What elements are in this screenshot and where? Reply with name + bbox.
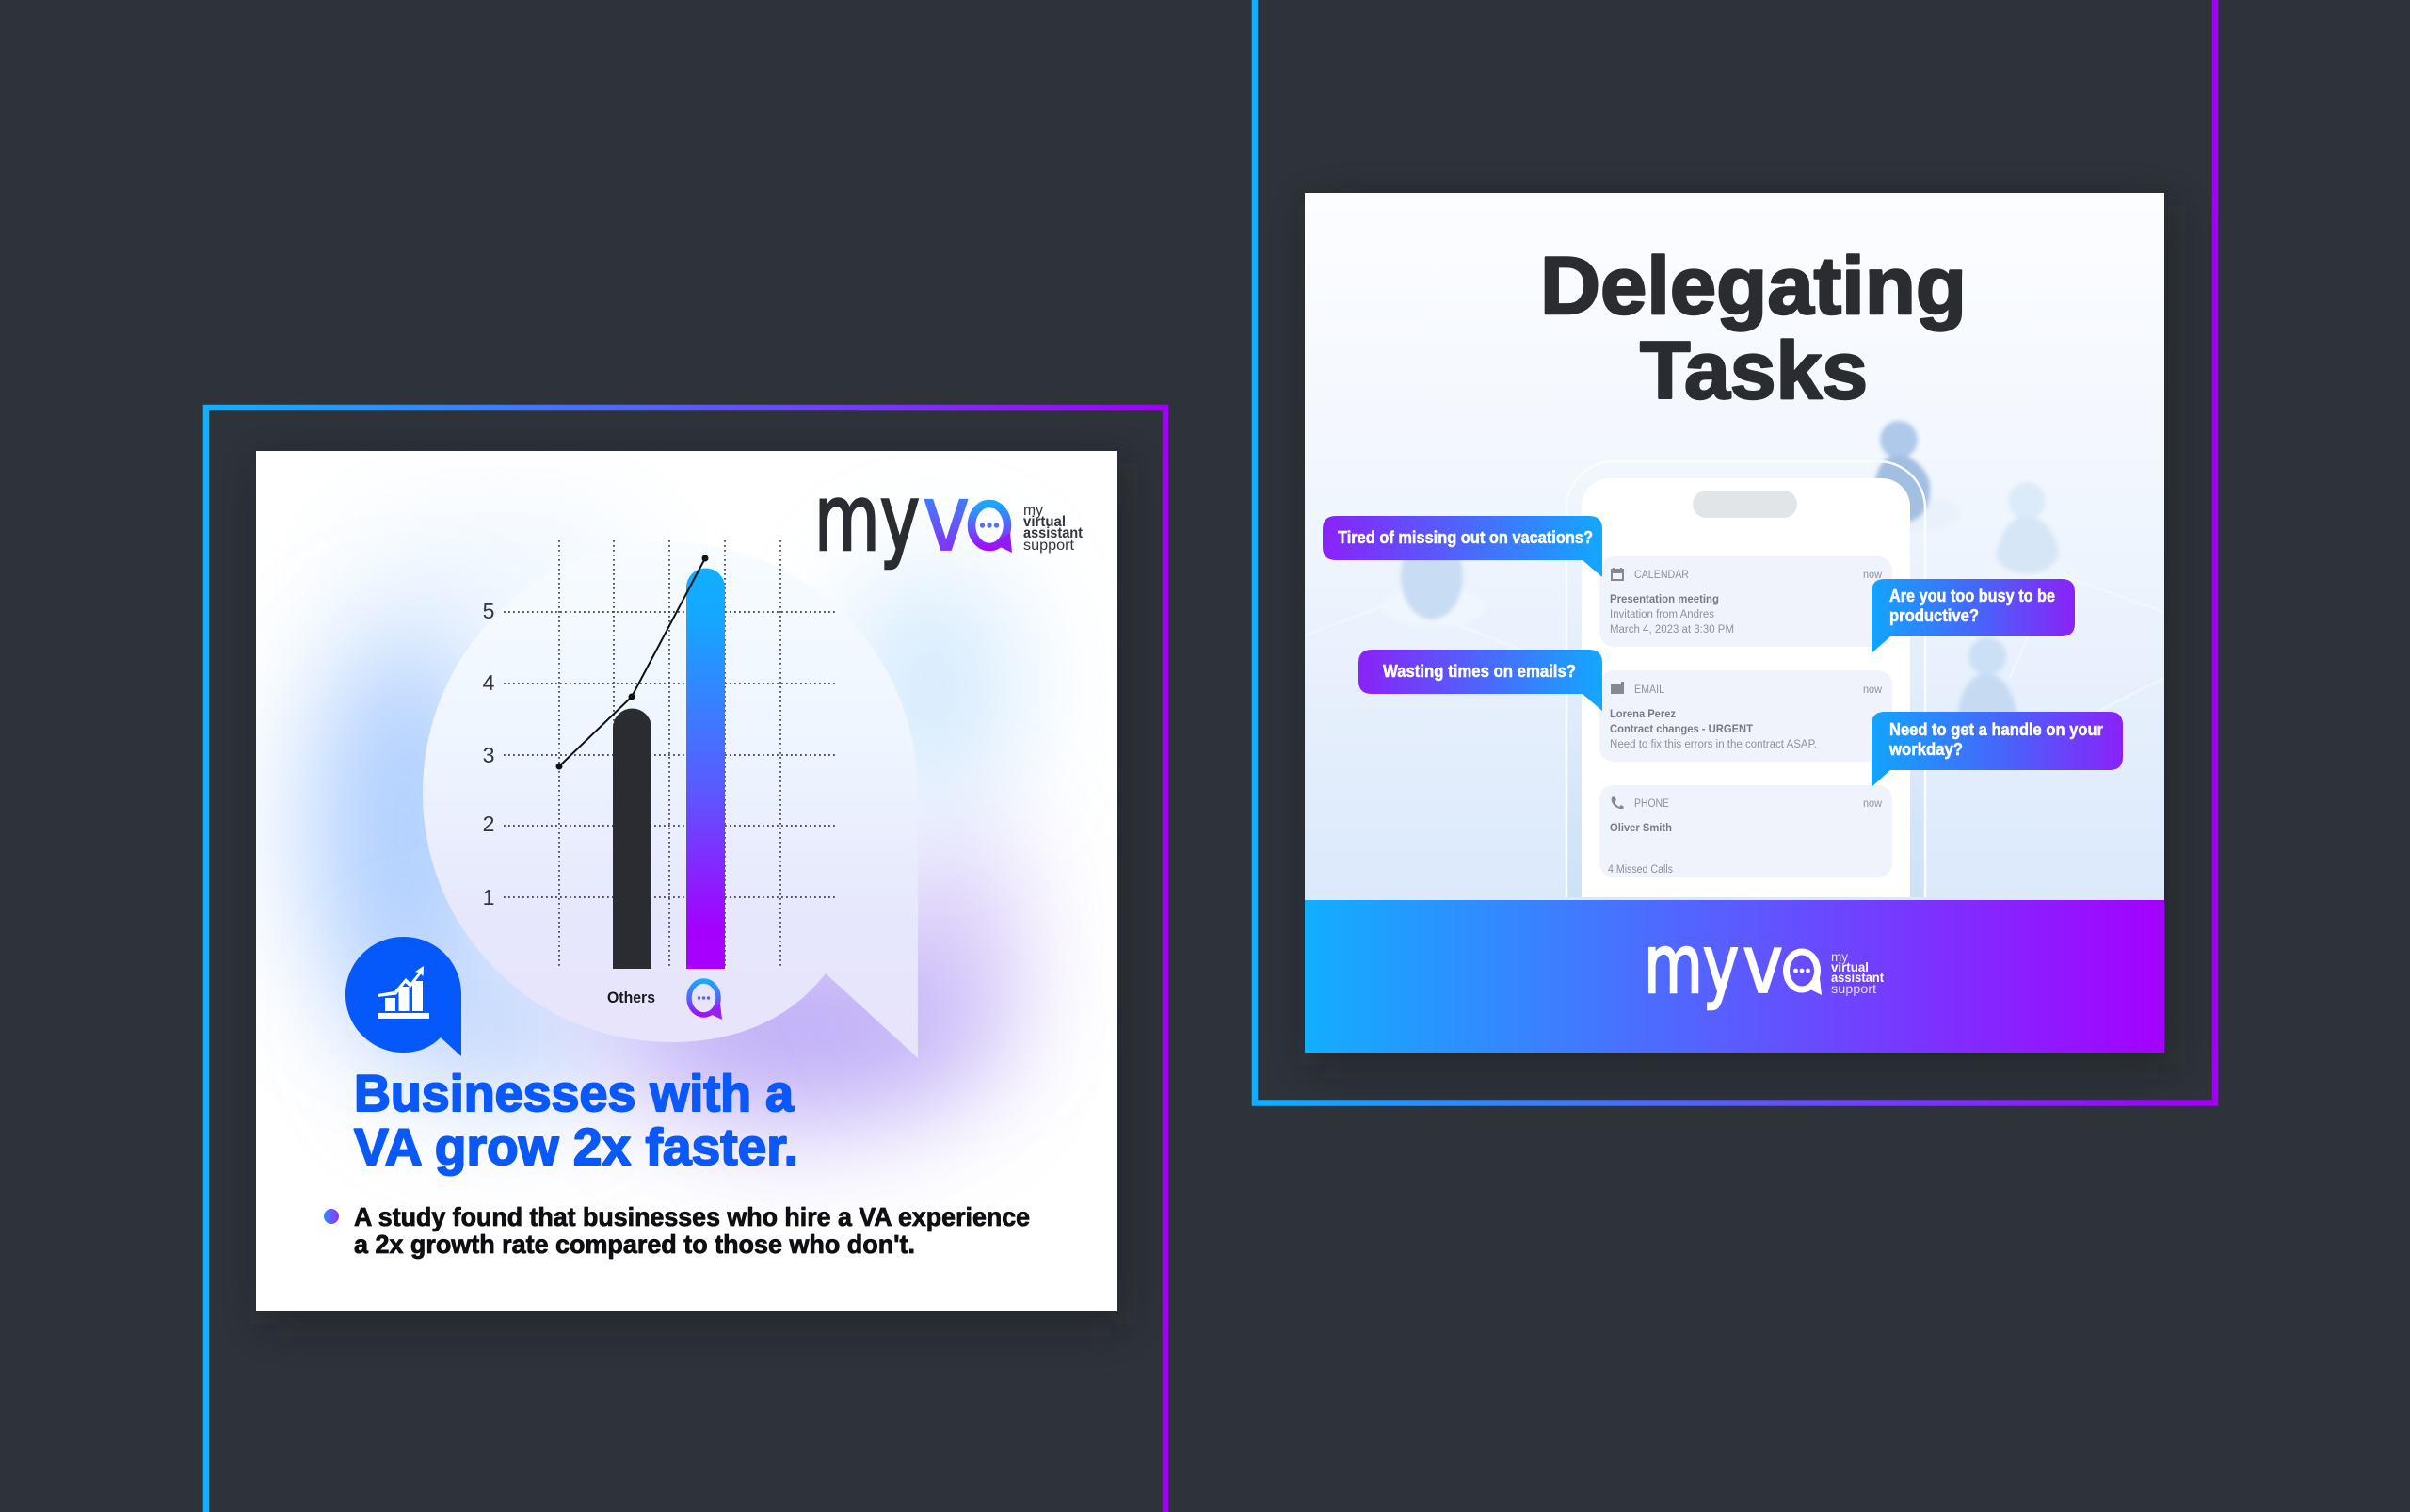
phone notch — [1693, 491, 1797, 518]
heading — [354, 1064, 798, 1176]
figure: lower right — [1956, 636, 2018, 712]
logo tagline: support — [1831, 981, 1876, 996]
axis numbers: 1 — [483, 885, 494, 909]
figure: top — [1873, 418, 1934, 525]
left card drop shadow — [264, 463, 1124, 1324]
callout: too busy: Are you too busy to be — [1889, 586, 2055, 605]
logo tagline: support — [1023, 538, 1075, 554]
left gradient frame — [206, 408, 1165, 1512]
logo: myva white — [1644, 918, 1884, 1012]
notification: calendar: now — [1863, 570, 1883, 581]
logo tagline: assistant — [1023, 525, 1083, 541]
notification: email: Need to fix this errors in the contract ASAP. — [1610, 739, 1817, 750]
figure: right — [1996, 482, 2060, 574]
notification: email: EMAIL — [1634, 684, 1665, 696]
notification: phone — [1599, 785, 1892, 877]
heading: VA grow 2x faster. — [354, 1118, 798, 1176]
title: Delegating — [1540, 241, 1967, 331]
large speech bubble — [423, 542, 918, 1058]
logo: myva dark: v — [923, 465, 970, 571]
icon: myva chat mark — [689, 981, 722, 1020]
card background — [256, 451, 1117, 1311]
phone mockup — [1566, 461, 1925, 897]
axis numbers — [483, 599, 495, 909]
axis numbers: 4 — [483, 670, 495, 695]
logo: myva dark: my — [814, 465, 920, 571]
logo tagline: my — [1831, 949, 1848, 964]
figure: left — [1399, 560, 1465, 619]
right gradient frame — [1255, 0, 2215, 1103]
heading: Businesses with a — [354, 1064, 794, 1122]
bar chart — [483, 540, 838, 1020]
phone body — [1582, 478, 1910, 897]
logo tagline — [1831, 949, 1884, 996]
callout: too busy — [1872, 579, 2075, 653]
notification: email: Contract changes - URGENT — [1610, 724, 1753, 735]
logo tagline — [1023, 503, 1083, 554]
notification: calendar: March 4, 2023 at 3:30 PM — [1610, 624, 1734, 635]
card background — [1305, 193, 2164, 901]
body text: a 2x growth rate compared to those who don't. — [354, 1230, 915, 1259]
axis numbers: 2 — [483, 812, 494, 836]
chart grid — [504, 540, 838, 969]
notification: phone: PHONE — [1634, 798, 1669, 810]
title: Tasks — [1640, 326, 1868, 416]
icon: rising bars — [378, 966, 429, 1019]
callout: too busy: productive? — [1889, 605, 1979, 625]
bullet — [324, 1209, 339, 1224]
others label: Others — [607, 989, 655, 1006]
phone outline — [1566, 461, 1925, 897]
callout: emails: Wasting times on emails? — [1383, 661, 1576, 681]
background colour glows — [311, 518, 1017, 1125]
callout: emails — [1358, 650, 1602, 711]
callout: workday: Need to get a handle on your — [1889, 719, 2103, 739]
notification: calendar: CALENDAR — [1634, 570, 1689, 581]
right card drop shadow — [1312, 205, 2172, 1065]
callout: vacations — [1323, 516, 1602, 577]
myva bar — [686, 569, 725, 969]
notification: calendar: Presentation meeting — [1610, 594, 1719, 605]
callout: workday: workday? — [1888, 739, 1963, 759]
callout: workday — [1872, 712, 2123, 787]
footer band — [1305, 900, 2164, 1053]
logo tagline: my — [1023, 503, 1043, 519]
notification: calendar — [1599, 556, 1892, 647]
icon: calendar — [1612, 568, 1623, 580]
notification: phone: now — [1863, 798, 1883, 810]
notification: phone: Oliver Smith — [1610, 823, 1672, 834]
axis numbers: 5 — [483, 599, 494, 623]
axis numbers: 3 — [483, 743, 494, 767]
network lines — [1305, 624, 2164, 712]
logo tagline: virtual — [1023, 514, 1066, 530]
notification: email — [1599, 670, 1892, 762]
body text: A study found that businesses who hire a VA experience — [354, 1202, 1030, 1231]
icon: white chat bubble a — [1787, 952, 1822, 995]
logo: myva dark — [814, 465, 1083, 571]
background figures and network — [1305, 421, 2164, 753]
title — [1540, 241, 1967, 416]
icon: phone — [1612, 796, 1624, 809]
growth trend line — [555, 555, 708, 770]
body text — [354, 1202, 1030, 1259]
others bar — [613, 708, 651, 969]
callout: vacations: Tired of missing out on vacations? — [1338, 527, 1593, 547]
panel: growth card — [256, 451, 1117, 1311]
notification: phone: 4 Missed Calls — [1608, 864, 1673, 876]
logo: myva white: my — [1644, 918, 1739, 1012]
panel: delegating tasks card — [1305, 193, 2164, 1053]
icon: chat bubble a — [972, 504, 1012, 553]
logo tagline: virtual — [1831, 959, 1869, 974]
icon: blue chart bubble — [345, 937, 461, 1056]
notification: calendar: Invitation from Andres — [1610, 609, 1714, 620]
notification: email: now — [1863, 684, 1883, 696]
logo tagline: assistant — [1831, 970, 1884, 985]
logo: myva white: v — [1743, 918, 1783, 1012]
notification: email: Lorena Perez — [1610, 709, 1676, 720]
icon: email — [1611, 682, 1624, 694]
